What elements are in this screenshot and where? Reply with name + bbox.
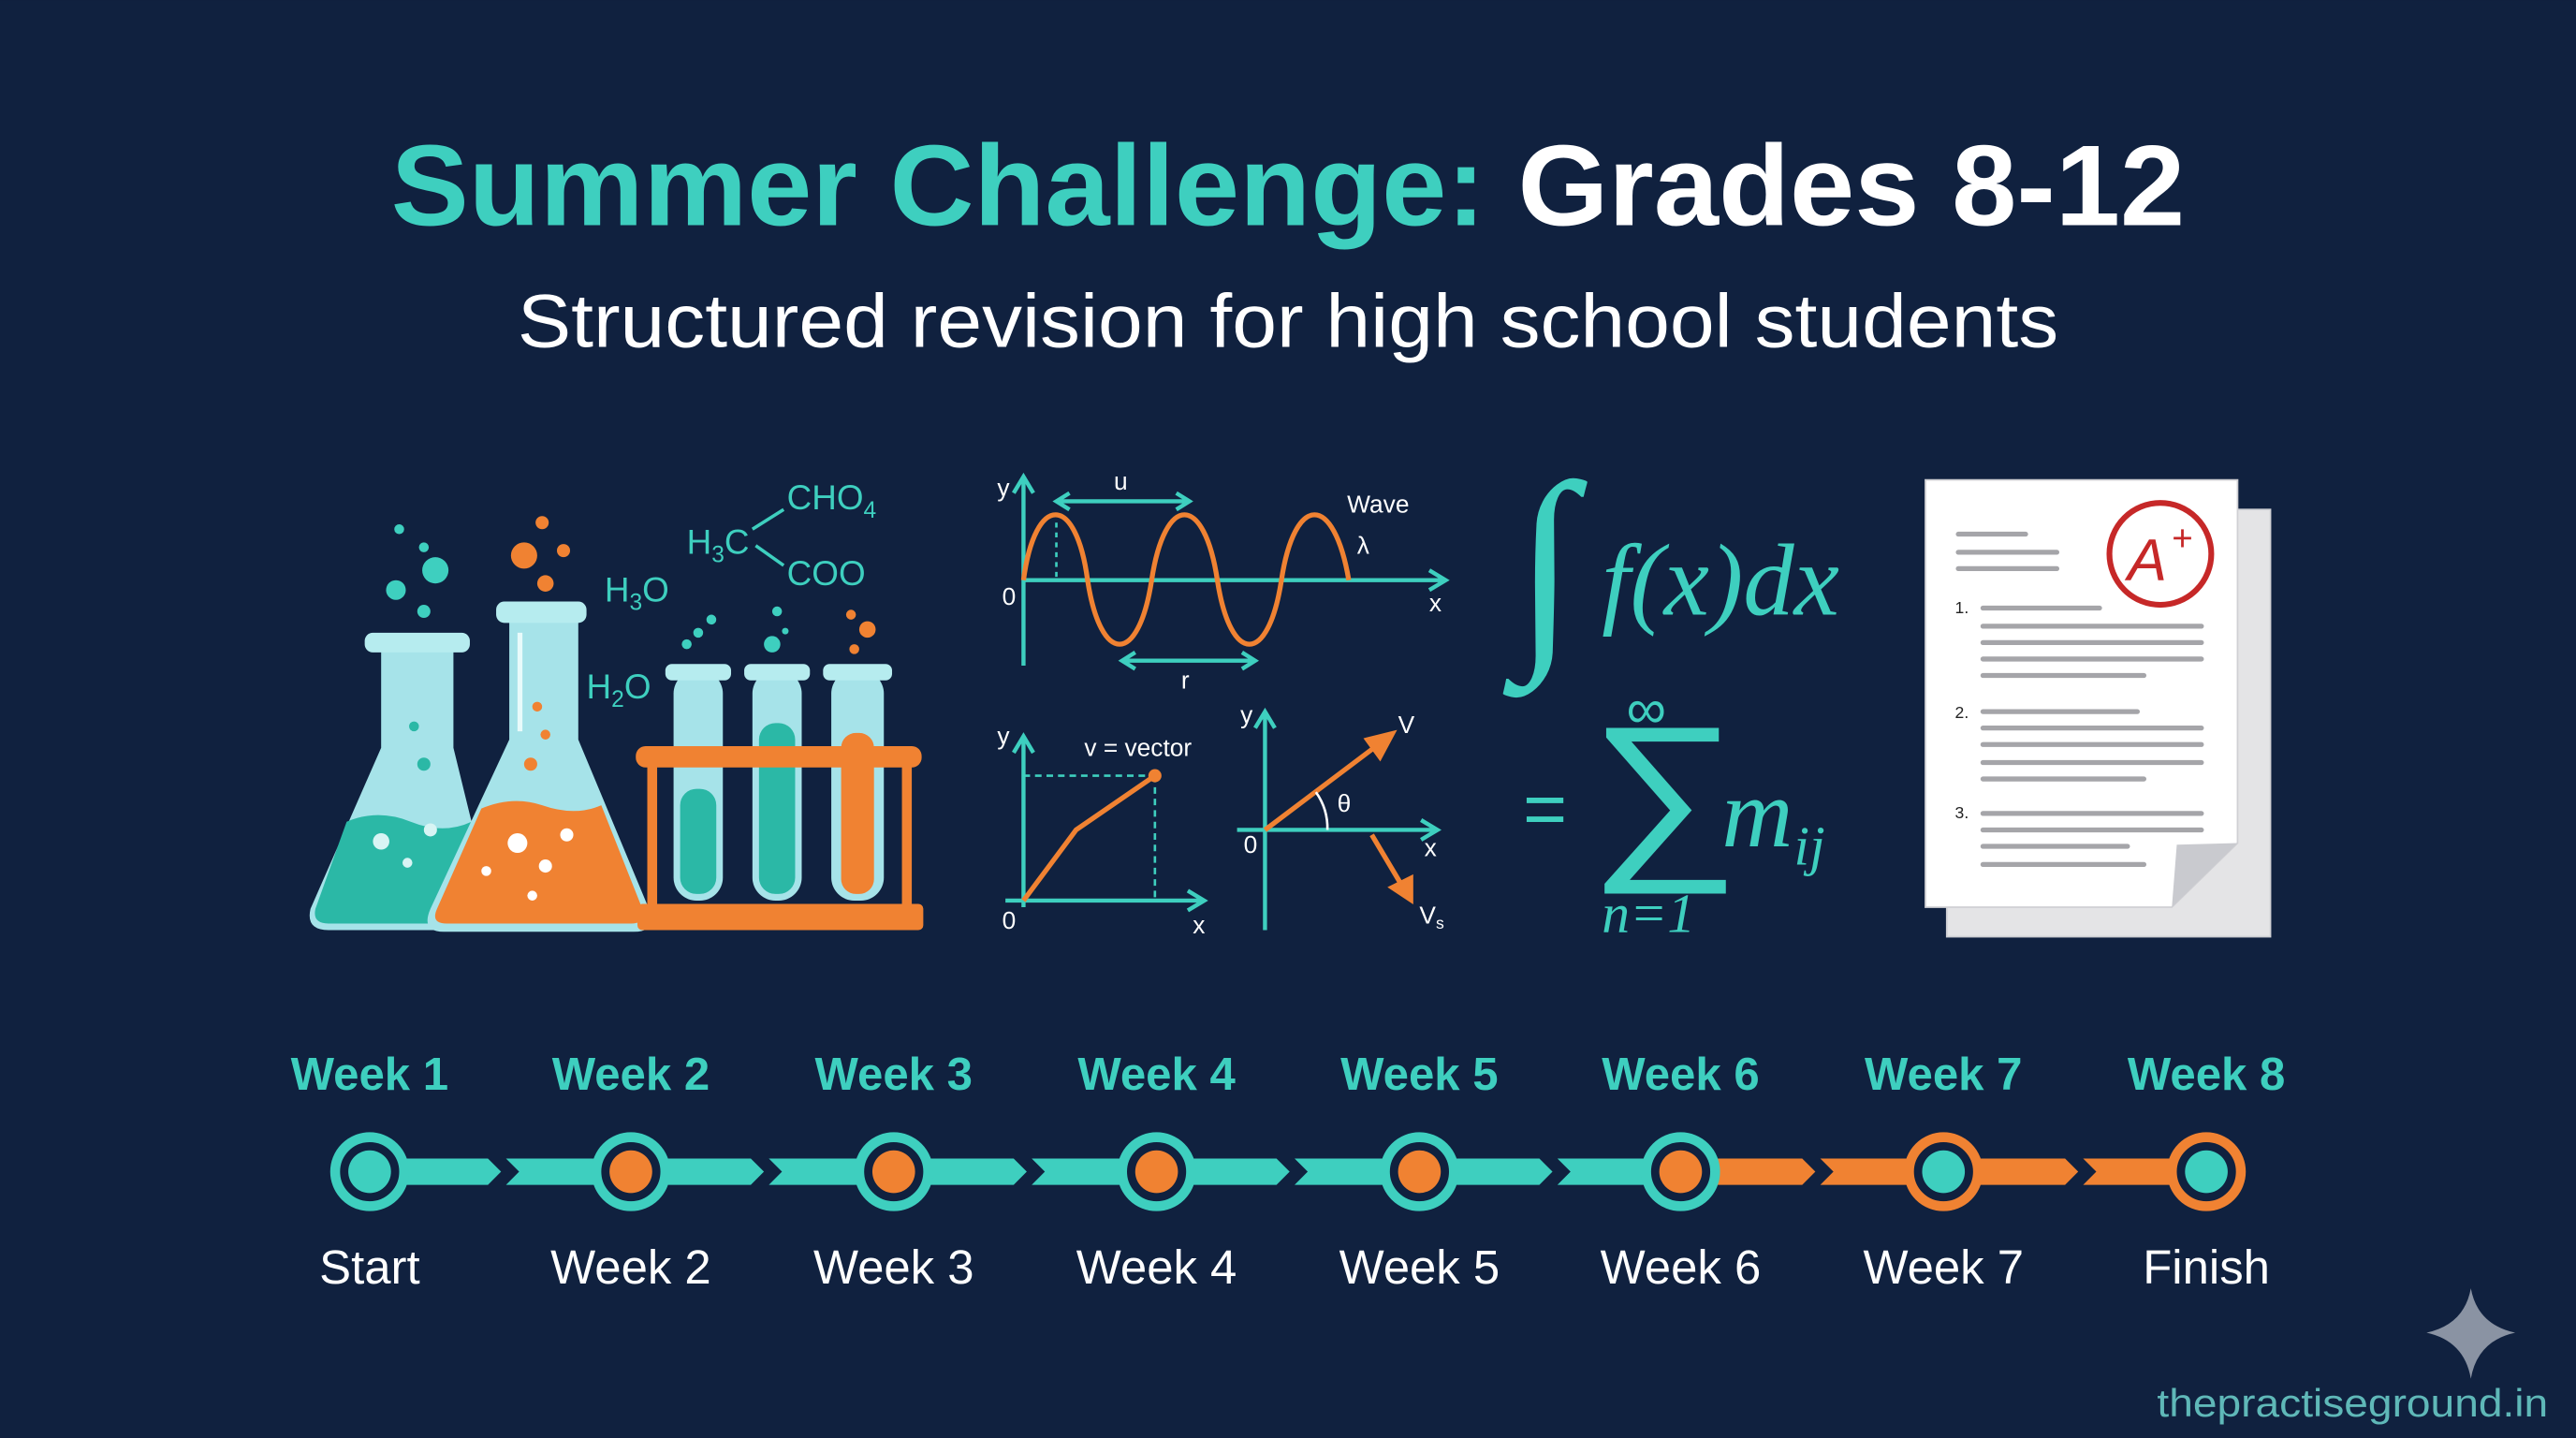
week headings: Week 7 <box>1865 1049 2022 1100</box>
math formula <box>1502 438 1839 944</box>
week headings <box>291 1049 2285 1100</box>
chemistry formulas: C <box>724 523 750 562</box>
math formula: n=1 <box>1602 882 1695 944</box>
chart: vector components: 0 <box>1244 830 1257 858</box>
week headings: Week 4 <box>1077 1049 1236 1100</box>
chart: wave graph: Wave <box>1347 491 1409 519</box>
chart: vector components: x <box>1425 834 1437 862</box>
chart: wave graph <box>997 467 1445 695</box>
node: week 4 <box>1122 1137 1191 1206</box>
icon: graded test paper: + <box>2172 519 2193 559</box>
milestone labels: Finish <box>2143 1240 2270 1294</box>
week headings: Week 6 <box>1602 1049 1760 1100</box>
illustration: chemistry glassware <box>310 478 923 932</box>
icon: sparkle watermark <box>2426 1288 2515 1379</box>
timeline <box>291 1049 2285 1294</box>
chemistry formulas: H <box>587 668 611 706</box>
math formula: ∫ <box>1502 438 1588 697</box>
week headings: Week 1 <box>291 1049 448 1100</box>
node: week 8 finish <box>2172 1137 2241 1206</box>
icon: flask orange <box>428 602 651 932</box>
icon: graded test paper: 2. <box>1955 703 1969 722</box>
chemistry formulas: 4 <box>864 498 876 523</box>
chemistry formulas: 3 <box>711 542 724 567</box>
node: week 2 <box>596 1137 666 1206</box>
timeline bars <box>370 1158 2206 1185</box>
chart: vector components: V <box>1419 902 1436 930</box>
footer url: thepractiseground.in <box>2157 1381 2548 1425</box>
math formula: m <box>1721 758 1793 868</box>
chemistry formulas: O <box>642 571 669 609</box>
chart: vector components: V <box>1398 711 1415 739</box>
milestone labels: Start <box>319 1240 420 1294</box>
chart: velocity graph: v = vector <box>1084 733 1192 761</box>
chart: vector components: θ <box>1338 789 1351 817</box>
chart: velocity graph <box>997 722 1205 939</box>
chart: vector components <box>1237 700 1444 932</box>
milestone labels: Week 6 <box>1601 1240 1761 1294</box>
chart: wave graph: λ <box>1357 532 1369 560</box>
node: week 6 <box>1647 1137 1715 1206</box>
milestone labels: Week 5 <box>1339 1240 1500 1294</box>
chart: velocity graph: y <box>997 722 1010 750</box>
icon: bubbles <box>386 516 875 654</box>
math formula: ∞ <box>1627 678 1666 741</box>
chemistry formulas: 2 <box>611 687 624 712</box>
chart: wave graph: r <box>1181 667 1190 695</box>
milestone labels: Week 3 <box>813 1240 974 1294</box>
chart: velocity graph: 0 <box>1003 906 1016 934</box>
chart: wave graph: x <box>1429 589 1442 617</box>
icon: graded test paper <box>1925 480 2271 937</box>
math formula: ∑ <box>1588 688 1739 894</box>
week headings: Week 5 <box>1340 1049 1499 1100</box>
chemistry formulas: H <box>687 523 711 562</box>
chemistry formulas: H <box>605 571 629 609</box>
icon: graded test paper: 1. <box>1955 598 1969 617</box>
chemistry formulas: 3 <box>629 590 642 615</box>
chart: wave graph: u <box>1114 467 1128 495</box>
chemistry formulas <box>587 478 876 712</box>
node: week 1 start <box>335 1137 404 1206</box>
chemistry formulas: O <box>624 668 651 706</box>
milestone labels: Week 2 <box>550 1240 711 1294</box>
math formula: = <box>1523 768 1567 852</box>
math formula: ij <box>1794 814 1825 876</box>
chart: vector components: s <box>1436 914 1444 932</box>
milestone labels <box>319 1240 2270 1294</box>
node: week 3 <box>859 1137 929 1206</box>
chart: wave graph: 0 <box>1003 582 1016 610</box>
milestone labels: Week 7 <box>1864 1240 2024 1294</box>
week headings: Week 2 <box>552 1049 710 1100</box>
chart: velocity graph: x <box>1193 911 1205 939</box>
week headings: Week 3 <box>815 1049 973 1100</box>
chart: wave graph: y <box>997 474 1010 502</box>
icon: flask teal <box>310 633 493 931</box>
node: week 5 <box>1385 1137 1454 1206</box>
week headings: Week 8 <box>2128 1049 2285 1100</box>
title: Summer Challenge: Grades 8-12 <box>391 123 2185 251</box>
subtitle: Structured revision for high school students <box>518 279 2058 363</box>
milestone labels: Week 4 <box>1076 1240 1237 1294</box>
chart: vector components: y <box>1240 700 1253 728</box>
icon: graded test paper: A <box>2124 528 2167 594</box>
math formula: f(x)dx <box>1602 524 1839 638</box>
icon: graded test paper: 3. <box>1955 803 1969 822</box>
node: week 7 <box>1909 1137 1978 1206</box>
chemistry formulas: COO <box>787 554 866 593</box>
chemistry formulas: CHO <box>787 478 864 517</box>
icon: test tube rack <box>636 664 923 931</box>
